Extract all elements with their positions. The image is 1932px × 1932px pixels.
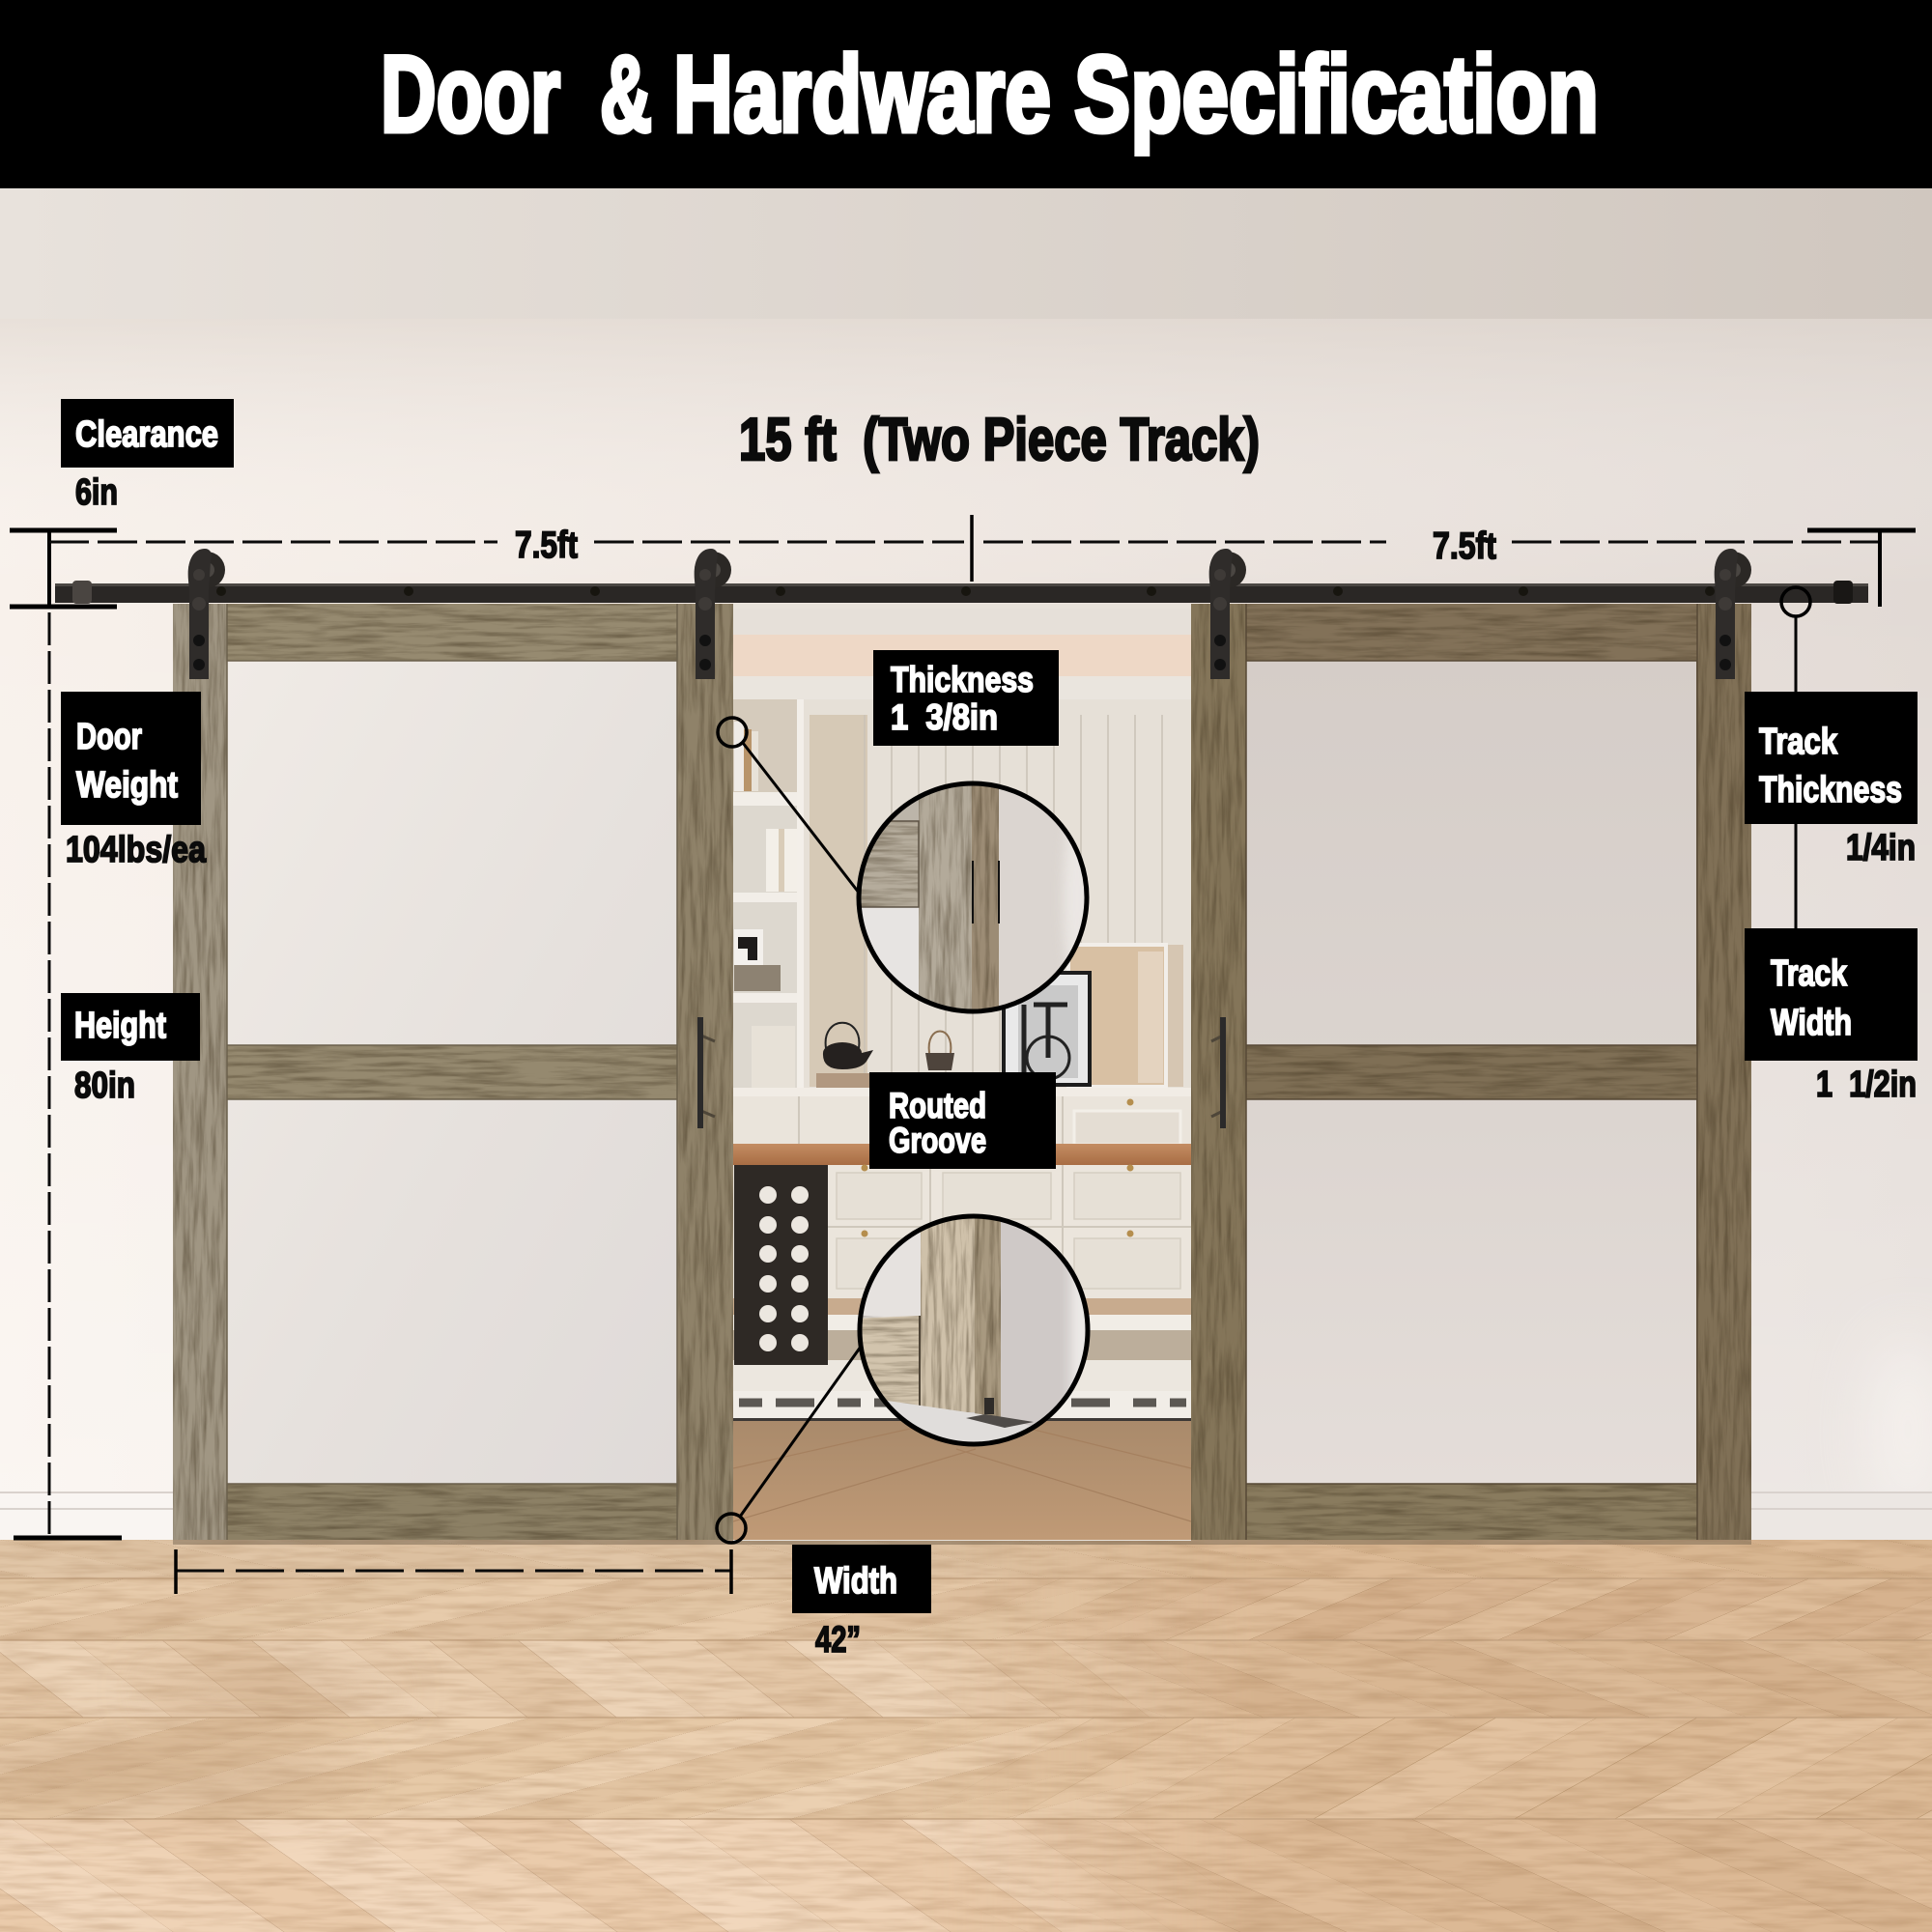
track end stop: right — [1833, 581, 1853, 604]
interior: panelled wall — [802, 699, 1191, 1088]
title banner — [0, 0, 1932, 188]
background: room wall — [0, 188, 1932, 1541]
width label: Width — [814, 1561, 897, 1602]
door weight label: Weight — [76, 765, 178, 806]
track end stop: left — [72, 581, 92, 604]
hanger strap 4 — [1715, 549, 1751, 679]
track thickness value: 1/4in — [1846, 828, 1916, 868]
track length heading: 15 ft (Two Piece Track) — [739, 407, 1260, 473]
track dimension: right half: 7.5ft — [1433, 526, 1496, 567]
title banner: Door — [381, 34, 560, 155]
track width label — [1745, 928, 1918, 1105]
height dimension line — [14, 612, 122, 1538]
door weight label: Door — [76, 717, 142, 757]
clearance value: 6in — [75, 472, 118, 513]
hanger strap 1 — [188, 549, 225, 679]
barn door: left — [173, 604, 733, 1540]
door weight label — [61, 692, 207, 870]
interior: rug and floor — [733, 1298, 1191, 1540]
hanger strap 2 — [695, 549, 731, 679]
groove callout leader — [717, 1347, 861, 1543]
door handle: right — [1211, 1017, 1226, 1128]
thickness label: 1 3/8in — [891, 697, 998, 737]
track dimension bracket: right — [1807, 530, 1916, 607]
track thickness label — [1745, 692, 1918, 868]
barn door: right — [1191, 604, 1751, 1540]
track width label: Track — [1771, 953, 1848, 994]
routed groove label: Groove — [889, 1121, 986, 1160]
clearance label: Clearance — [75, 414, 218, 455]
thickness callout leader — [718, 718, 859, 893]
door weight value: 104lbs/ea — [66, 830, 207, 870]
title banner: Hardware — [673, 34, 1051, 155]
routed groove label: Routed — [889, 1086, 986, 1125]
centre tick — [970, 515, 974, 582]
track thickness label: Track — [1759, 722, 1838, 762]
magnifier: routed groove — [858, 1213, 1090, 1447]
thickness label: Thickness — [891, 660, 1034, 699]
width dimension line — [176, 1549, 731, 1594]
clearance dimension bracket: left — [10, 530, 117, 607]
routed groove label — [869, 1072, 1056, 1169]
thickness label — [873, 650, 1059, 746]
sliding track rail — [55, 581, 1868, 604]
height label — [61, 993, 200, 1106]
clearance label — [61, 399, 234, 513]
magnifier: door thickness — [856, 781, 1090, 1014]
track dimension: left half: 7.5ft — [515, 525, 578, 566]
interior: black desk leg with holes — [734, 1165, 828, 1365]
track width label: Width — [1771, 1003, 1852, 1043]
hanger strap 3 — [1209, 549, 1246, 679]
height value: 80in — [74, 1065, 135, 1106]
width label — [792, 1545, 931, 1661]
interior: kettles and art — [816, 945, 1183, 1088]
interior: cabinets and counter — [733, 1088, 1191, 1299]
interior: bookshelf — [733, 699, 804, 1088]
interior room seen through the doorway — [733, 604, 1191, 1541]
herringbone wood floor — [0, 1540, 1932, 1932]
width value: 42” — [815, 1620, 861, 1661]
track callout line and marker — [1781, 587, 1810, 928]
height label: Height — [74, 1006, 166, 1046]
title banner: Specification — [1074, 34, 1599, 155]
door handle: left — [697, 1017, 715, 1128]
title banner: & — [600, 34, 652, 155]
